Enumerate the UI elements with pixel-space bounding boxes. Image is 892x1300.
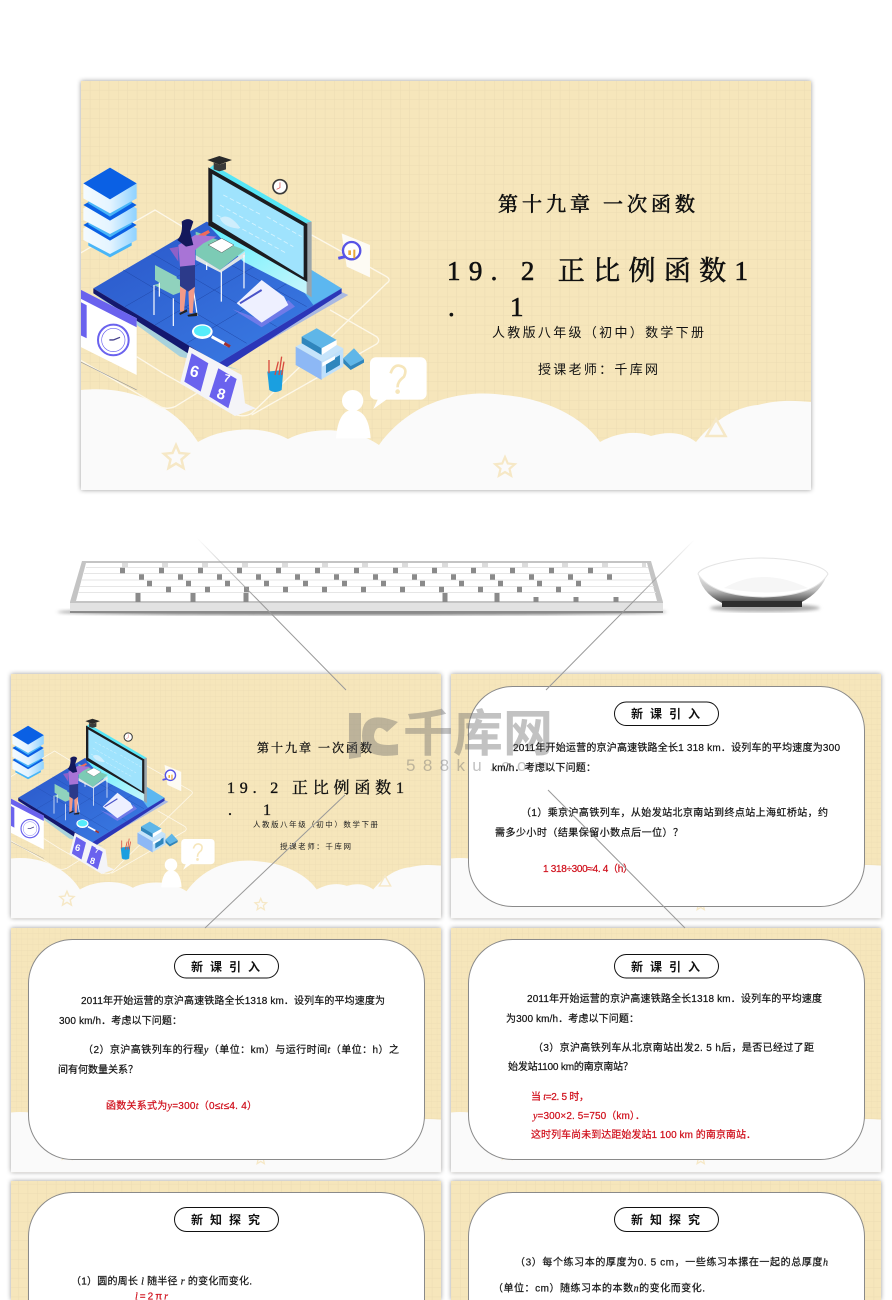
- problem statement: 2011年开始运营的京沪高速铁路全长1318 km．设列车的平均速度为: [81, 994, 385, 1007]
- answer 3: [531, 1090, 756, 1141]
- lesson title: 19. 2 正比例函数1: [447, 256, 748, 286]
- problem statement: 2011年开始运营的京沪高速铁路全长1318 km．设列车的平均速度: [527, 992, 822, 1005]
- cover illustration: isometric classroom: 6: [188, 363, 201, 382]
- diagonal watermark lines: [197, 538, 694, 928]
- question 1: 需多少小时（结果保留小数点后一位）？: [495, 826, 683, 839]
- answer 2: 函数关系式为y=300t（0≤t≤4. 4）: [106, 1099, 257, 1112]
- slide 2: question 1: [451, 674, 881, 918]
- watermark url: 588ku.com: [406, 756, 548, 775]
- thumbnail lesson title: 1: [263, 802, 271, 819]
- section pill: 新课引入: [191, 959, 267, 974]
- question 3: 始发站1100 km的南京南站？: [508, 1060, 633, 1073]
- problem statement: 2011年开始运营的京沪高速铁路全长1 318 km．设列车的平均速度为300: [513, 741, 840, 754]
- slide 5: circle example: [11, 1181, 441, 1300]
- example 1: （1）圆的周长 l 随半径 r 的变化而变化.: [71, 1274, 252, 1288]
- slide 4: question 3: [451, 928, 881, 1172]
- section pill: 新课引入: [631, 959, 707, 974]
- textbook line: 人教版八年级（初中）数学下册: [492, 325, 704, 340]
- problem statement: km/h．考虑以下问题：: [492, 761, 596, 774]
- section pill: [174, 954, 278, 978]
- keyboard: [57, 561, 667, 615]
- lesson title: 1: [510, 292, 524, 322]
- slide 6: notebook example: [451, 1181, 881, 1300]
- example 3: [493, 1256, 828, 1294]
- section pill: 新知探究: [631, 1212, 707, 1227]
- teacher line: 授课老师：千库网: [538, 362, 658, 377]
- thumbnail background: [11, 674, 441, 918]
- answer 3: 这时列车尚未到达距始发站1 100 km 的南京南站．: [531, 1128, 756, 1141]
- answer 3: y=300×2. 5=750（km）．: [532, 1110, 645, 1122]
- thumbnail illustration: [10, 719, 215, 887]
- content panel: [28, 1192, 424, 1300]
- example 3: （3）每个练习本的厚度为0. 5 cm，一些练习本摞在一起的总厚度h: [515, 1256, 828, 1268]
- answer 3: 当 t=2. 5 时，: [531, 1090, 589, 1103]
- section pill: [614, 1208, 718, 1232]
- question 3: （3）京沪高铁列车从北京南站出发2. 5 h后，是否已经过了距: [533, 1041, 814, 1054]
- question 3: [508, 1041, 814, 1073]
- section pill: [614, 954, 718, 978]
- cover illustration: isometric classroom: 8: [215, 385, 227, 404]
- cover illustration: isometric classroom: [80, 156, 427, 438]
- watermark name: 千库网: [403, 706, 553, 762]
- problem statement: [59, 994, 385, 1027]
- section pill: [174, 1208, 278, 1232]
- question 2: 间有何数量关系？: [58, 1063, 138, 1076]
- question 1: [495, 806, 828, 839]
- main cover slide: [80, 81, 811, 490]
- cover background: [81, 81, 811, 490]
- content panel: [468, 940, 864, 1160]
- question 2: [58, 1043, 399, 1076]
- cover illustration: isometric classroom: 7: [222, 372, 231, 386]
- answer 1: 1 318÷300≈4. 4（h）: [543, 863, 633, 875]
- section pill: 新课引入: [631, 706, 707, 721]
- thumbnail textbook line: 人教版八年级（初中）数学下册: [253, 819, 378, 829]
- thumbnail lesson title: .: [228, 802, 232, 819]
- content panel: [468, 686, 864, 906]
- thumbnail illustration: 7: [94, 848, 100, 855]
- thumbnail lesson title: 19. 2 正比例函数1: [227, 779, 404, 797]
- watermark logo: [349, 706, 553, 775]
- content panel: [468, 1192, 864, 1300]
- problem statement: [506, 992, 822, 1025]
- watermark mark: [349, 713, 398, 759]
- question 2: （2）京沪高铁列车的行程y（单位：km）与运行时间t（单位：h）之: [83, 1043, 399, 1056]
- thumbnail teacher line: 授课老师：千库网: [280, 841, 351, 851]
- section pill: 新知探究: [191, 1212, 267, 1227]
- question 1: （1）乘京沪高铁列车，从始发站北京南站到终点站上海虹桥站，约: [521, 806, 828, 819]
- problem statement: [492, 741, 840, 774]
- thumbnail illustration: 8: [89, 855, 96, 866]
- example 3: （单位：cm）随练习本的本数n的变化而变化.: [493, 1282, 705, 1294]
- content panel: [28, 940, 424, 1160]
- slide 1: cover thumbnail: [10, 674, 441, 918]
- mouse: [698, 558, 828, 612]
- thumbnail illustration: 6: [74, 842, 82, 854]
- thumbnail chapter heading: 第十九章 一次函数: [257, 740, 372, 755]
- lesson title: .: [448, 292, 455, 322]
- slide 3: question 2: [11, 928, 441, 1172]
- problem statement: 300 km/h．考虑以下问题：: [59, 1014, 182, 1027]
- problem statement: 为300 km/h．考虑以下问题：: [506, 1012, 639, 1025]
- section pill: [614, 702, 718, 726]
- chapter heading: 第十九章 一次函数: [498, 193, 695, 216]
